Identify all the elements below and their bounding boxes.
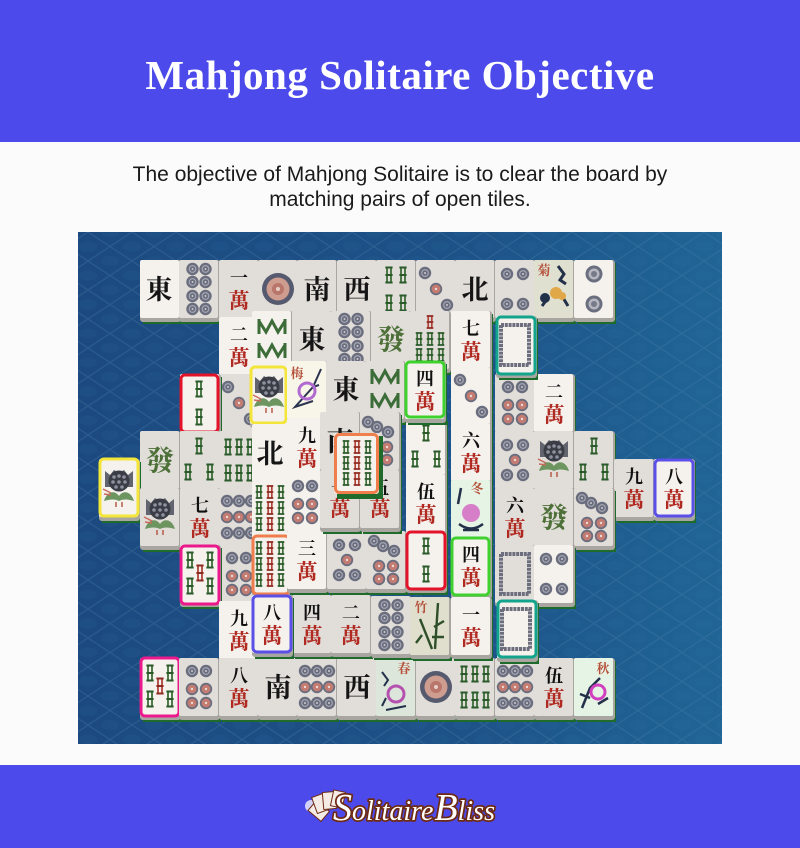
tile: six wan — [451, 423, 493, 487]
tile: five wan: 萬 — [544, 687, 564, 711]
tile: plum flower: 梅 — [290, 366, 304, 381]
tile: six circles — [287, 474, 329, 538]
tile: eight wan blue outline — [654, 459, 696, 523]
tile: nine wan — [287, 418, 329, 482]
tile: five wan under stack — [360, 470, 402, 534]
intro text: The objective of Mahjong Solitaire is to clear the board by — [133, 163, 667, 186]
base layer, left and right rows — [99, 317, 696, 665]
tile: white dragon — [495, 545, 537, 609]
tile: four wan: 四 — [303, 603, 321, 623]
tile: bamboo zigzag — [365, 361, 407, 425]
tile: wan under stack: 萬 — [330, 497, 350, 521]
tile: autumn flower — [574, 658, 616, 722]
tile: four wan green outline: 四 — [462, 545, 480, 565]
tile: eight wan — [219, 658, 261, 722]
tile: three wan: 萬 — [296, 560, 318, 584]
tile: two wan: 二 — [230, 325, 248, 345]
tile: two bamboo red outline — [406, 531, 448, 595]
tile: green dragon: 發 — [377, 324, 405, 356]
tile: nine wan — [219, 601, 261, 665]
tile: north wind: 北 — [462, 275, 488, 305]
tile: eight wan blue outline: 萬 — [664, 488, 684, 512]
tile: north wind — [455, 260, 497, 324]
tile: four wan green outline — [451, 537, 493, 601]
tile: two wan — [219, 317, 261, 381]
tile: one circle — [258, 260, 300, 324]
tile: two wan: 萬 — [340, 624, 362, 648]
tile: nine circles — [297, 658, 339, 722]
tile: six wan: 六 — [462, 431, 482, 451]
tile: five wan — [534, 658, 576, 722]
tile: two wan: 萬 — [544, 403, 564, 427]
tile: spring flower: 春 — [397, 661, 411, 676]
board background — [78, 232, 722, 744]
tile: three wan: 三 — [298, 539, 316, 559]
tile: south wind — [258, 658, 300, 722]
tile: west wind: 西 — [344, 673, 370, 703]
top row of tiles — [140, 260, 616, 324]
tile: six wan: 六 — [506, 496, 526, 516]
tile: seven circles — [366, 531, 408, 595]
tile: four wan — [292, 595, 334, 659]
tile: five circles — [495, 431, 537, 495]
tile: bamboo zigzag — [252, 311, 294, 375]
tile: five wan — [406, 474, 448, 538]
tile: nine wan: 萬 — [296, 447, 318, 471]
tile: five wan: 萬 — [416, 503, 436, 527]
tile: four wan green outline — [405, 361, 447, 425]
tile: four wan: 萬 — [302, 624, 322, 648]
tile: nine wan: 九 — [230, 609, 248, 629]
tile: spring flower — [376, 658, 418, 722]
tile: west wind — [337, 260, 379, 324]
tile: east wind: 東 — [298, 325, 326, 355]
tile: two wan — [331, 595, 373, 659]
tile: nine wan — [614, 459, 656, 523]
tile: wan under stack: 七 — [331, 478, 349, 498]
tile: green dragon — [534, 488, 576, 552]
tile: east wind: 東 — [146, 275, 172, 305]
tile: east wind — [292, 311, 334, 375]
raised centre block — [320, 412, 402, 534]
tile: five wan: 伍 — [545, 666, 563, 686]
tile: eight wan blue outline: 八 — [263, 603, 281, 623]
tile: four circles — [534, 545, 576, 609]
tile: eight wan blue outline — [252, 595, 294, 659]
tile: four wan green outline: 四 — [416, 369, 434, 389]
logo: Solitaire Bliss — [305, 787, 496, 829]
tile: seven wan — [180, 488, 222, 552]
tile: five circles — [327, 531, 369, 595]
tile: four bamboo — [376, 260, 418, 324]
tile: north wind — [252, 424, 294, 488]
tile: nine circles — [219, 488, 261, 552]
tile: bamboo flower — [410, 597, 452, 661]
tile: green dragon: 發 — [540, 502, 568, 534]
tile: flower — [140, 488, 182, 552]
tile: wind under stack: 南 — [326, 427, 354, 457]
tile: eight bamboo pink outline — [180, 545, 222, 609]
tile: north wind: 北 — [256, 439, 284, 469]
tile: eight bamboo — [410, 311, 452, 375]
tile: nine circles — [495, 658, 537, 722]
tile: three bamboo — [406, 418, 448, 482]
tile: three bamboo — [574, 431, 616, 495]
tile: three circles — [219, 374, 261, 438]
tile: eight wan: 八 — [230, 666, 248, 686]
tile: six wan: 萬 — [460, 452, 482, 476]
tile: one wan — [219, 260, 261, 324]
tile: five wan: 伍 — [417, 482, 435, 502]
tile: one wan: 萬 — [228, 289, 250, 313]
tile: plum flower — [287, 361, 329, 425]
tile: nine wan: 九 — [298, 426, 316, 446]
tile: bamboo flower: 竹 — [414, 600, 428, 615]
tile: winter flower: 冬 — [470, 481, 484, 496]
white dragon tiles with teal outlines — [496, 316, 539, 664]
tile: nine wan: 萬 — [228, 630, 250, 654]
tile: flower — [534, 431, 576, 495]
tile: eight wan blue outline: 八 — [665, 467, 683, 487]
tile: five wan under stack: 萬 — [370, 497, 390, 521]
tile: one wan: 萬 — [460, 626, 482, 650]
second layer of tiles — [250, 311, 493, 661]
tile: two wan — [534, 374, 576, 438]
tile: four wan green outline: 萬 — [460, 566, 482, 590]
tile: seven circles — [574, 488, 616, 552]
tile: nine bamboo orange outline — [334, 433, 383, 499]
tile: wan under stack — [320, 470, 362, 534]
logo wordmark: SolitaireBliss — [333, 787, 495, 829]
tile: six circles — [495, 374, 537, 438]
tile: white dragon teal outline — [496, 316, 538, 380]
tile: green dragon — [371, 311, 413, 375]
tile: three wan — [287, 531, 329, 595]
tile: east wind — [326, 361, 368, 425]
tile: two wan: 二 — [342, 603, 360, 623]
tile: south wind: 南 — [264, 673, 292, 703]
tile: eight circles — [371, 596, 413, 660]
tile: autumn flower: 秋 — [596, 661, 610, 676]
tile: west wind — [337, 658, 379, 722]
tile: two wan: 萬 — [228, 346, 250, 370]
tile: green dragon: 發 — [146, 445, 174, 477]
tile: six circles — [179, 658, 221, 722]
tile: flower yellow outline — [250, 366, 292, 430]
tile: seven wan: 萬 — [460, 340, 482, 364]
tile: one wan: 一 — [230, 268, 248, 288]
tile: nine wan: 萬 — [624, 488, 644, 512]
tile: one wan — [451, 597, 493, 661]
tile: six circles — [219, 545, 261, 609]
intro text: matching pairs of open tiles. — [269, 188, 531, 211]
tile: seven wan — [451, 311, 493, 375]
tile: six wan — [495, 488, 537, 552]
intro text — [133, 163, 668, 211]
third layer of tiles — [287, 361, 448, 595]
tile: south wind: 南 — [304, 275, 330, 305]
tile: one wan: 一 — [462, 605, 480, 625]
tile: seven wan: 七 — [191, 496, 209, 516]
tile: chrysanthemum: 菊 — [537, 263, 551, 278]
tile: eight circles — [331, 311, 373, 375]
tile: white dragon teal outline — [497, 600, 539, 664]
tile: eight bamboo pink outline — [140, 658, 182, 722]
tile: two bamboo red outline — [180, 374, 222, 438]
tile: eight circles — [179, 260, 221, 324]
tile: east wind — [140, 260, 182, 324]
bottom row of tiles — [140, 658, 616, 722]
tile: three circles — [416, 260, 458, 324]
tile: six bamboo — [455, 658, 497, 722]
header band — [0, 0, 800, 142]
title: Mahjong Solitaire Objective — [145, 52, 655, 98]
icon: fan of cards — [305, 790, 346, 821]
tile: flower yellow outline — [99, 459, 141, 523]
tile: seven wan: 七 — [462, 319, 480, 339]
mahjong board — [78, 232, 722, 744]
tile: two wan: 二 — [545, 382, 563, 402]
tile: five wan under stack: 伍 — [371, 478, 389, 498]
tile: three circles — [451, 367, 493, 431]
tile: south wind — [297, 260, 339, 324]
tile: west wind: 西 — [344, 275, 370, 305]
tile: green dragon — [140, 431, 182, 495]
tile: one circle — [416, 658, 458, 722]
footer band — [0, 765, 800, 848]
tile: nine bamboo — [252, 481, 294, 545]
tile: east wind: 東 — [332, 375, 360, 405]
tile: two circles — [574, 260, 616, 324]
tile: eight wan blue outline: 萬 — [262, 624, 282, 648]
tile: six bamboo — [219, 431, 261, 495]
tile: nine wan: 九 — [625, 467, 643, 487]
tile: eight wan: 萬 — [228, 687, 250, 711]
tile: three bamboo — [180, 431, 222, 495]
tile: winter flower — [451, 480, 493, 544]
tile: chrysanthemum — [534, 260, 576, 324]
tile: seven circles — [360, 412, 402, 476]
tile: four wan green outline: 萬 — [414, 390, 436, 414]
tile: six wan: 萬 — [504, 517, 526, 541]
tile: seven wan: 萬 — [190, 517, 210, 541]
tile: four circles — [495, 260, 537, 324]
tile: nine bamboo orange outline — [252, 535, 294, 599]
